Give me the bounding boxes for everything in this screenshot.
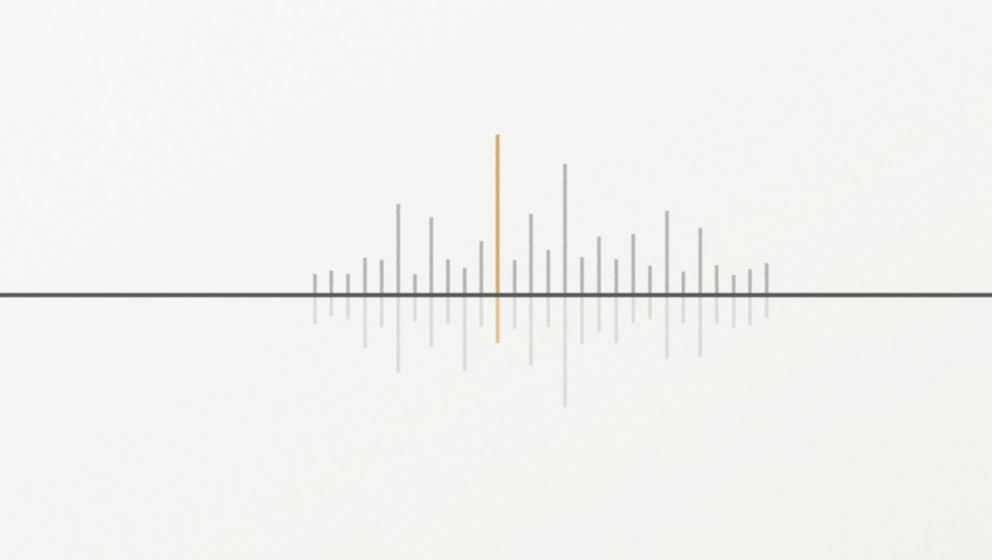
reflected grey bars below baseline <box>315 295 767 407</box>
baseline <box>0 293 992 297</box>
highlighted orange bar <box>496 134 500 343</box>
grey bars above baseline <box>315 164 767 295</box>
